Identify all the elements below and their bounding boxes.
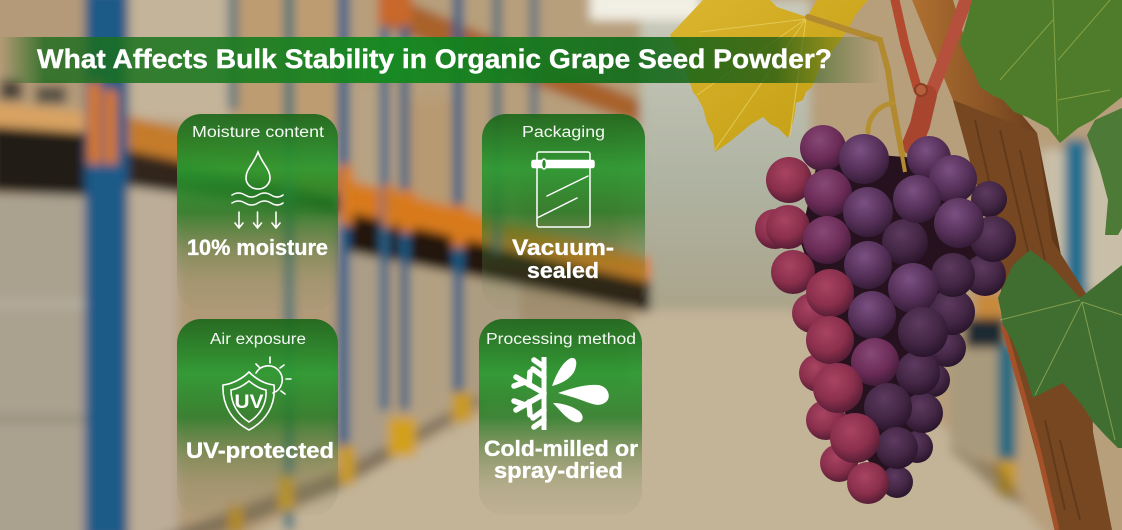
pallet shadows xyxy=(150,395,480,530)
yellow grape leaf xyxy=(670,0,868,152)
grape cluster xyxy=(755,105,1016,504)
heading: packaging: Packaging xyxy=(522,124,605,141)
green grape leaf top right xyxy=(960,0,1122,143)
panel: moisture content xyxy=(177,114,338,310)
orange upright details xyxy=(88,82,101,164)
panel: packaging xyxy=(482,114,645,310)
icon: UV shield with sun xyxy=(223,357,291,430)
blue uprights xyxy=(85,0,128,530)
right side shelving xyxy=(1040,150,1122,290)
floor xyxy=(240,310,1050,530)
heading: processing method: Processing method xyxy=(486,331,636,348)
shelf beam with dark shadow xyxy=(340,208,650,312)
orange beams xyxy=(0,102,90,133)
title: What Affects Bulk Stability in Organic Grape Seed Powder? xyxy=(37,44,832,74)
icon: water drop with waves and arrows xyxy=(232,152,283,228)
green grape leaf bottom right xyxy=(998,250,1122,448)
value: vacuum-sealed: sealed xyxy=(527,258,599,283)
vine stems xyxy=(808,0,966,170)
left wrapped pallets xyxy=(0,195,90,530)
panel: processing method xyxy=(479,319,642,515)
value: 10% moisture: 10% moisture xyxy=(187,235,328,260)
title banner xyxy=(0,37,880,83)
small green leaf right edge xyxy=(1087,108,1122,235)
icon: half snowflake and splash xyxy=(514,357,609,430)
label: UV text in shield: UV xyxy=(234,392,264,413)
yellow bases xyxy=(339,445,355,485)
tree trunk xyxy=(912,0,1112,530)
boxes mid aisle xyxy=(345,250,390,460)
value: cold-milled or spray-dried: Cold-milled or xyxy=(484,436,638,461)
heading: air exposure: Air exposure xyxy=(210,331,306,348)
far aisle wall xyxy=(640,0,810,330)
value: cold-milled or spray-dried xyxy=(484,436,638,483)
value: cold-milled or spray-dried: spray-dried xyxy=(494,458,623,483)
value: vacuum-sealed xyxy=(512,235,614,283)
icon: vacuum-sealed bag xyxy=(532,152,594,227)
panel: air exposure xyxy=(177,319,338,515)
value: vacuum-sealed: Vacuum- xyxy=(512,235,614,260)
dark under beam xyxy=(0,125,90,196)
heading: moisture content: Moisture content xyxy=(192,124,325,141)
top left boxes xyxy=(0,0,85,105)
value: UV-protected: UV-protected xyxy=(186,438,334,463)
